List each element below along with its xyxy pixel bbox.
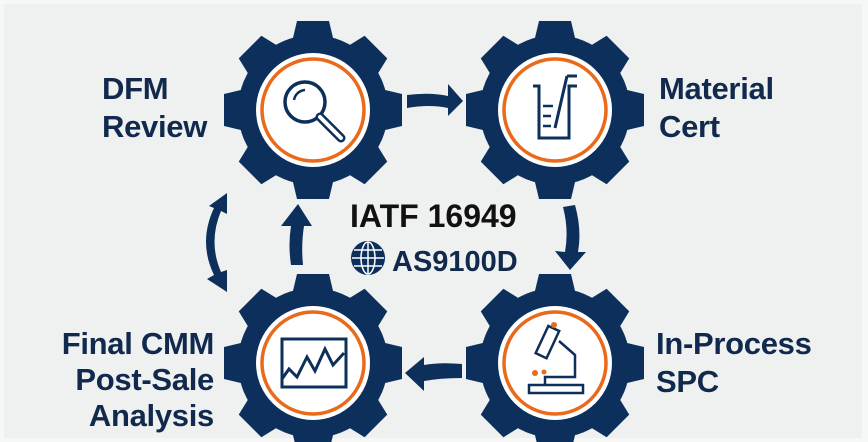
gear: DFM review (magnifier) <box>224 21 402 199</box>
center title: IATF 16949 <box>350 198 517 234</box>
gear: Material cert (beaker) <box>466 21 644 199</box>
label: In-Process SPC: SPC <box>656 364 719 399</box>
arrow: top right <box>407 84 463 116</box>
label: Final CMM: Post-Sale <box>75 362 214 397</box>
center subtitle: AS9100D <box>392 246 518 278</box>
label: Final CMM: Final CMM <box>62 326 214 361</box>
label: Material Cert: Cert <box>659 109 720 144</box>
globe icon <box>352 242 384 274</box>
label: Final CMM: Analysis <box>89 398 214 433</box>
gear: Final CMM (chart) <box>224 274 402 442</box>
label: Material Cert <box>659 71 774 144</box>
label: In-Process SPC <box>656 326 812 399</box>
label: Material Cert: Material <box>659 71 774 106</box>
arrow: right down <box>555 205 586 270</box>
label: Final CMM <box>62 326 214 433</box>
label: DFM Review: DFM <box>102 71 168 106</box>
label: DFM Review: Review <box>102 109 207 144</box>
gear: In-process SPC (microscope) <box>466 274 644 442</box>
label: DFM Review <box>102 71 208 144</box>
arrow: left double curved <box>206 193 227 292</box>
arrow: left up <box>281 204 312 265</box>
arrow: bottom left <box>405 357 462 391</box>
label: In-Process SPC: In-Process <box>656 326 812 361</box>
